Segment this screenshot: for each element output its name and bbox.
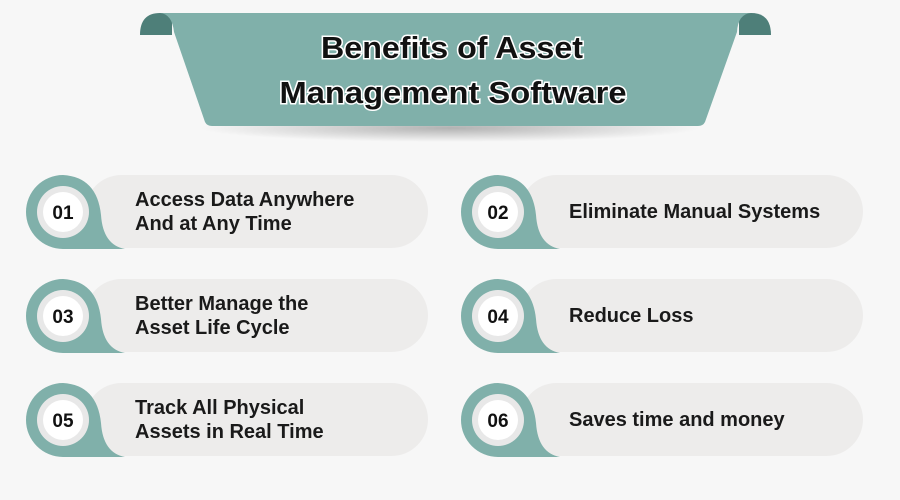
card 01: Access Data Anywhere [135,189,354,211]
banner: title: Benefits of Asset [321,30,583,65]
card 01: And at Any Time [135,213,292,235]
card 02: Eliminate Manual Systems [569,201,820,223]
card 01: 01 [52,203,74,224]
card 05: Track All Physical [135,397,304,419]
card 03: 03 [52,307,74,328]
card 02: 02 [487,203,509,224]
card 05: Assets in Real Time [135,421,324,443]
card 06: Saves time and money [569,409,786,431]
card 06: 06 [487,411,509,432]
card 04 [461,279,863,353]
card 01 [26,175,428,249]
card 03 [26,279,428,353]
card 05: 05 [52,411,74,432]
card 06 [461,383,863,457]
card 03: Better Manage the [135,293,308,315]
banner: title [140,13,771,142]
card 05 [26,383,428,457]
card 04: 04 [487,307,509,328]
card 03: Asset Life Cycle [135,317,290,339]
banner: title: Management Software [280,75,626,110]
card 04: Reduce Loss [569,305,693,327]
card 02 [461,175,863,249]
